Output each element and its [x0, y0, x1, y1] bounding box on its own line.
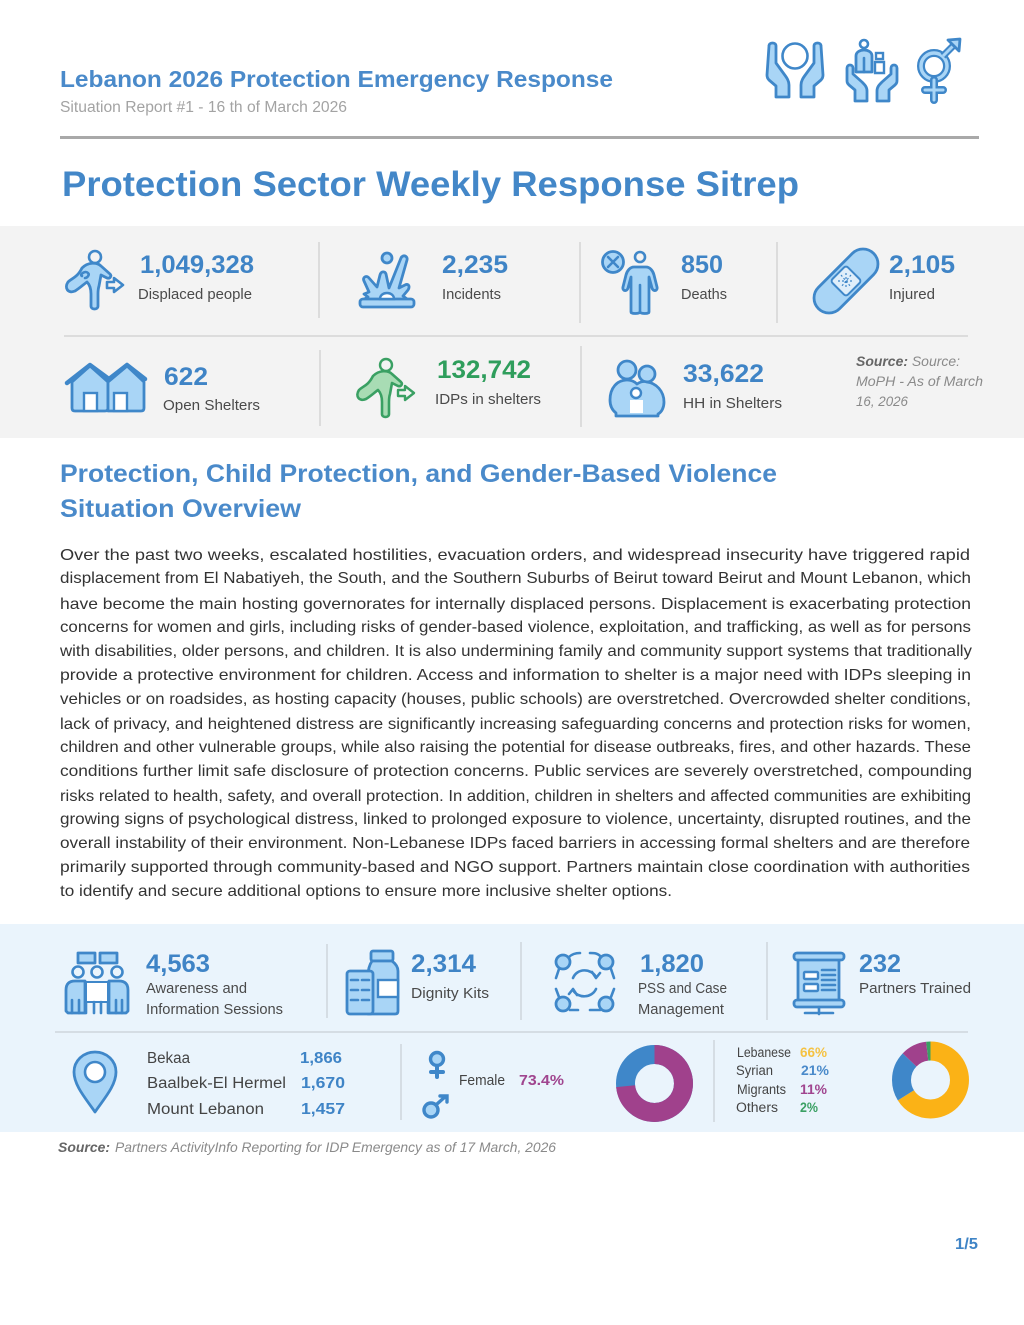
stat: deaths: Deaths [681, 287, 727, 303]
icon: PSS and case management [556, 953, 614, 1011]
icon: hands holding circle [767, 43, 823, 97]
stat: injured [889, 251, 955, 303]
stat: awareness sessions: Information Sessions [146, 1002, 283, 1018]
stat: HH in shelters: 33,622 [683, 360, 764, 388]
main title: Protection Sector Weekly Response Sitrep [62, 165, 799, 204]
legend: nationality: Others [736, 1100, 778, 1115]
stat: dignity kits: 2,314 [411, 950, 476, 978]
section heading: Protection, Child Protection, and Gender-Based Violence [60, 460, 777, 488]
stat: female share [459, 1073, 564, 1089]
table: governorates: 1,866 [300, 1050, 342, 1067]
stat: incidents [442, 251, 508, 303]
icon: displaced person [66, 251, 123, 309]
stat: IDPs in shelters: IDPs in shelters [435, 392, 541, 408]
legend: nationality: 11% [800, 1082, 827, 1097]
header divider line [60, 136, 979, 139]
situation overview text: to identify and secure additional options to ensure more inclusive shelter options. [60, 883, 672, 900]
stat: open shelters: 622 [164, 363, 208, 391]
stat: PSS and case management: 1,820 [640, 950, 704, 978]
chart: nationality donut [902, 1051, 960, 1109]
legend: nationality: 21% [801, 1063, 829, 1078]
situation overview text: overall instability of their environment. Non-Lebanese IDPs faced barriers in accessing formal shelters and are therefore [60, 835, 970, 852]
icon: household [610, 361, 664, 416]
situation overview text: lack of privacy, and heightened distress are significantly increasing safeguarding concerns and protection risks for women, [60, 716, 971, 733]
icon: deaths [602, 252, 657, 314]
stat: injured: 2,105 [889, 251, 955, 279]
legend: nationality: Syrian [736, 1063, 773, 1078]
icon: gender symbol [921, 39, 960, 100]
stat: incidents: 2,235 [442, 251, 508, 279]
stat: open shelters [163, 363, 260, 414]
situation overview text: with disabilities, older persons, and children. It is also undermining family and community support systems that traditionally [59, 643, 972, 660]
icon: hands holding family [847, 40, 897, 101]
icon: bandage [808, 243, 884, 319]
chart: gender donut [626, 1054, 684, 1112]
stat: dignity kits: Dignity Kits [411, 986, 489, 1002]
legend: nationality [736, 1045, 829, 1115]
stat: awareness sessions [146, 950, 283, 1018]
stat: displaced people [138, 251, 254, 303]
stat: IDPs in shelters: 132,742 [437, 356, 531, 384]
source note: MoPH: MoPH - As of March [856, 374, 983, 389]
icon: dignity kits [347, 951, 398, 1014]
situation overview text: growing signs of psychological distress, linked to prolonged exposure to violence, uncertainty, disrupted routines, and the [60, 811, 971, 828]
icon: location pin [74, 1052, 116, 1112]
situation overview text: provide a protective environment for children. Access and information to shelter is a major need with IDPs sleeping in [60, 667, 971, 684]
situation overview text: risks related to health, safety, and overall protection. In addition, children in shelters and affected communities are exhibiting [60, 788, 971, 805]
stat: deaths [681, 251, 727, 303]
stat: awareness sessions: 4,563 [146, 950, 210, 978]
table: governorates: 1,457 [301, 1101, 345, 1118]
legend: nationality: Migrants [737, 1082, 786, 1097]
header title: Lebanon 2026 Protection Emergency Response [60, 66, 613, 92]
stat: displaced people: Displaced people [138, 287, 252, 303]
table: governorates: 1,670 [301, 1075, 345, 1092]
situation overview text: conditions further limit safe disclosure of protection concerns. Public services are severely overstretched, compounding [60, 763, 972, 780]
icon: incidents [360, 253, 414, 307]
page number: 1/5 [955, 1236, 978, 1253]
situation overview text: children and other vulnerable groups, while also raising the potential for disease outbreaks, fires, and other hazards. These [60, 739, 971, 756]
legend: nationality: 2% [800, 1100, 818, 1115]
stat: HH in shelters [683, 360, 782, 412]
stat: injured: Injured [889, 287, 935, 303]
legend: nationality: 66% [800, 1045, 827, 1060]
section heading: Situation Overview [60, 495, 302, 523]
stat: partners trained [859, 950, 971, 997]
legend: nationality: Lebanese [737, 1045, 791, 1060]
stat: PSS and case management [638, 950, 727, 1018]
stat: female share: Female [459, 1073, 505, 1089]
stat: partners trained: 232 [859, 950, 901, 978]
table: governorates: Mount Lebanon [147, 1101, 264, 1118]
stat: IDPs in shelters [435, 356, 541, 408]
table: governorates: Baalbek-El Hermel [147, 1075, 286, 1092]
stat: female share: 73.4% [519, 1073, 564, 1089]
header subtitle: Situation Report #1 - 16 th of March 2026 [60, 99, 347, 116]
stat: displaced people: 1,049,328 [140, 251, 254, 279]
stat: HH in shelters: HH in Shelters [683, 396, 782, 412]
icon: female and male symbols [424, 1052, 447, 1117]
source note: MoPH [856, 354, 983, 409]
situation overview text: concerns for women and girls, including risks of gender-based violence, exploitation, and trafficking, as well as for persons [60, 619, 971, 636]
icon: IDPs in shelters [357, 359, 414, 417]
stat: open shelters: Open Shelters [163, 398, 260, 414]
table: governorates: Bekaa [147, 1050, 190, 1067]
stat: partners trained: Partners Trained [859, 981, 971, 997]
situation overview text: primarily supported through community-based and NGO support. Partners maintain close coordination with authorities [60, 859, 970, 876]
panel: key figures [0, 226, 1024, 438]
section heading [60, 460, 777, 523]
icon: partners trained [794, 953, 844, 1014]
stat: PSS and case management: PSS and Case [638, 981, 727, 997]
source note: ActivityInfo: Source: [58, 1139, 110, 1155]
situation overview text: Over the past two weeks, escalated hostilities, evacuation orders, and widespread insecurity have triggered rapid [60, 547, 970, 564]
icon: houses [67, 365, 145, 411]
source note: MoPH: Source: Source: [856, 354, 960, 369]
stat: dignity kits [411, 950, 489, 1002]
situation overview text: have become the main hosting governorates for internally displaced persons. Displacement is exacerbating protection [60, 596, 971, 613]
icon: awareness sessions [66, 953, 128, 1013]
panel: response figures [0, 924, 1024, 1132]
source note: ActivityInfo: Partners ActivityInfo Reporting for IDP Emergency as of 17 March, 2026 [115, 1139, 556, 1155]
situation overview text: displacement from El Nabatiyeh, the South, and the Southern Suburbs of Beirut toward Beirut and Mount Lebanon, which [60, 570, 971, 587]
stat: PSS and case management: Management [638, 1002, 724, 1018]
stat: incidents: Incidents [442, 287, 501, 303]
stat: deaths: 850 [681, 251, 723, 279]
stat: awareness sessions: Awareness and [146, 981, 247, 997]
table: governorates [147, 1050, 345, 1118]
source note: MoPH: 16, 2026 [856, 394, 908, 409]
situation overview text: vehicles or on roadsides, as hosting capacity (houses, public schools) are overstretched. Overcrowded shelter conditions, [60, 691, 971, 708]
situation overview text [59, 547, 972, 900]
